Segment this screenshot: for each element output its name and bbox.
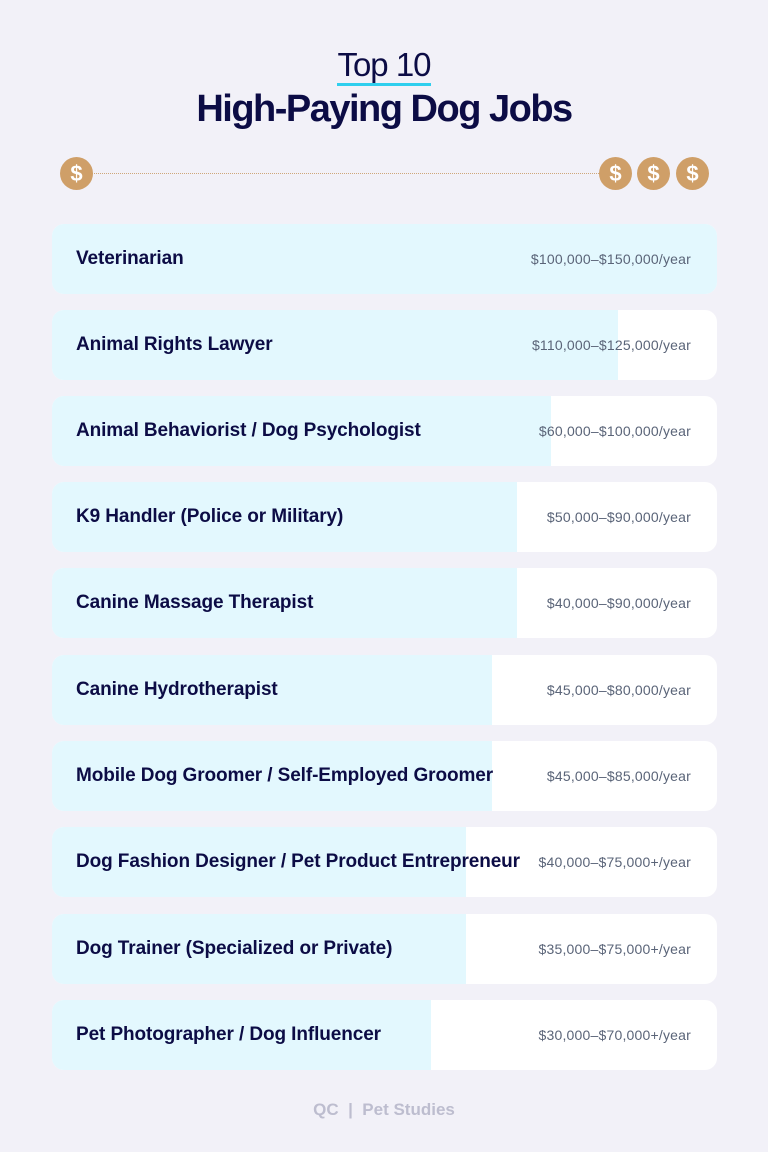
row 5: Canine Massage Therapist (76, 592, 313, 613)
row 2: Animal Rights Lawyer (76, 334, 272, 355)
row 3: $60,000–$100,000/year (539, 423, 691, 439)
row 9 (52, 914, 717, 984)
icon: high coins: $ (609, 161, 622, 186)
row 9: Dog Trainer (Specialized or Private) (76, 938, 392, 959)
row 7: Mobile Dog Groomer / Self-Employed Groomer (76, 765, 493, 786)
row 7 (52, 741, 717, 811)
row 10: Pet Photographer / Dog Influencer (76, 1024, 381, 1045)
row 3: Animal Behaviorist / Dog Psychologist (76, 420, 421, 441)
row 1: $100,000–$150,000/year (531, 251, 691, 267)
row 8 (52, 827, 717, 897)
row 8: Dog Fashion Designer / Pet Product Entrepreneur (76, 851, 520, 872)
row 4: K9 Handler (Police or Military) (76, 506, 343, 527)
row 1: Veterinarian (76, 248, 184, 269)
icon: high coins (599, 157, 709, 190)
row 10 (52, 1000, 717, 1070)
row 2 (52, 310, 717, 380)
row 7: $45,000–$85,000/year (547, 768, 691, 784)
icon: high coins: $ (686, 161, 699, 186)
row 1 (52, 224, 717, 294)
footer logo: QC | Pet Studies (313, 1100, 455, 1119)
row 8: $40,000–$75,000+/year (538, 854, 691, 870)
icon: low coin: $ (70, 161, 83, 186)
row 5: $40,000–$90,000/year (547, 595, 691, 611)
row 9: $35,000–$75,000+/year (538, 941, 691, 957)
row 6 (52, 655, 717, 725)
icon: low coin (60, 157, 93, 190)
title: Top 10: Top 10 (337, 46, 431, 83)
dotted scale line (90, 173, 605, 174)
row 4: $50,000–$90,000/year (547, 509, 691, 525)
row 4 (52, 482, 717, 552)
row 10: $30,000–$70,000+/year (538, 1027, 691, 1043)
row 3 (52, 396, 717, 466)
row 6: $45,000–$80,000/year (547, 682, 691, 698)
title: main: High-Paying Dog Jobs (196, 88, 572, 130)
row 6: Canine Hydrotherapist (76, 679, 278, 700)
row 2: $110,000–$125,000/year (532, 337, 691, 353)
icon: high coins: $ (647, 161, 660, 186)
row 5 (52, 568, 717, 638)
